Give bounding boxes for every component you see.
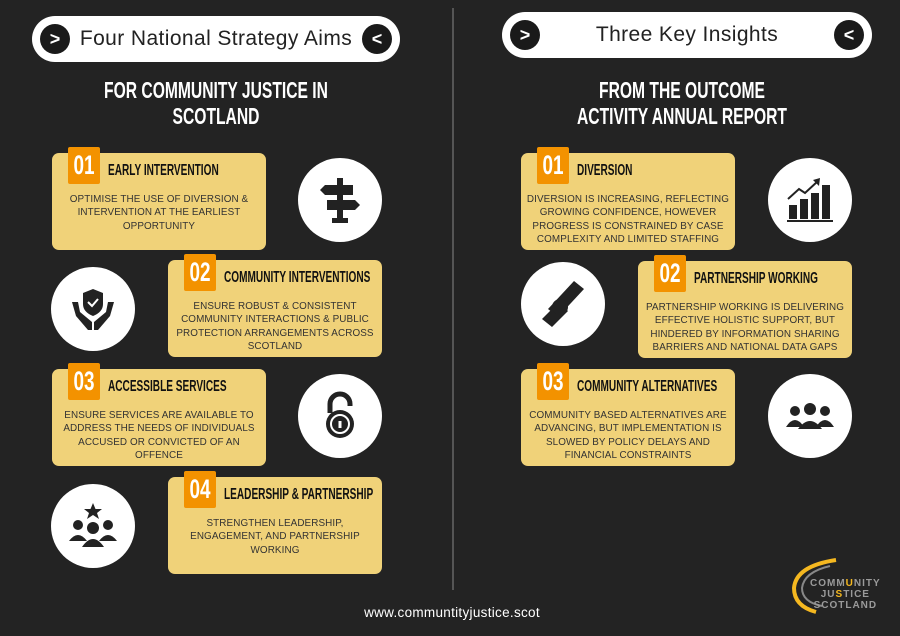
card: community interventions: COMMUNITY INTERACTIONS & PUBLIC (181, 314, 369, 325)
header pill: left (32, 16, 400, 62)
card: accessible services: ACCESSIBLE SERVICES (108, 378, 227, 395)
logo: COMMUNITY (810, 578, 881, 589)
card: community interventions: COMMUNITY INTERVENTIONS (224, 269, 370, 286)
icon: signpost (298, 158, 382, 242)
card: early intervention: OPPORTUNITY (123, 221, 195, 232)
card: community alternatives: ADVANCING, BUT IMPLEMENTATION IS (534, 423, 722, 434)
card: diversion: PROGRESS IS CONSTRAINED BY CASE (532, 221, 724, 232)
card: community alternatives (521, 369, 735, 466)
card: early intervention: OPTIMISE THE USE OF DIVERSION & (70, 194, 248, 205)
header pill: right: > (520, 25, 530, 45)
icon: hands shield (51, 267, 135, 351)
header pill: right: < (844, 25, 854, 45)
header pill: left: > (50, 29, 60, 49)
card: leadership & partnership: ENGAGEMENT, AND PARTNERSHIP (190, 531, 360, 542)
card: community interventions: 02 (189, 257, 211, 287)
logo (792, 558, 881, 614)
subtitle left: SCOTLAND (173, 103, 259, 129)
card: diversion: DIVERSION (577, 162, 632, 179)
card: accessible services: ADDRESS THE NEEDS OF INDIVIDUALS (63, 423, 255, 434)
card: partnership working (638, 261, 852, 358)
header pill: left: < (372, 29, 382, 49)
card: partnership working: 02 (659, 258, 681, 288)
card: community interventions: SCOTLAND (248, 341, 302, 352)
card: diversion: GROWING CONFIDENCE, HOWEVER (540, 207, 716, 218)
card: diversion: COMPLEXITY AND LIMITED STAFFING (537, 234, 719, 245)
card: leadership & partnership: STRENGTHEN LEADERSHIP, (206, 518, 344, 529)
card: community alternatives: COMMUNITY BASED ALTERNATIVES ARE (529, 410, 727, 421)
card: leadership & partnership: LEADERSHIP & PARTNERSHIP (224, 486, 373, 503)
card: diversion: 01 (542, 150, 564, 180)
icon: padlock (298, 374, 382, 458)
logo: JUSTICE (821, 589, 870, 600)
divider (452, 8, 454, 590)
subtitle right (577, 77, 787, 129)
icon: handshake (521, 262, 605, 346)
icon: people star (51, 484, 135, 568)
card: early intervention: 01 (73, 150, 95, 180)
footer url: www.communtityjustice.scot (364, 605, 540, 620)
card: accessible services (52, 369, 266, 466)
subtitle left: FOR COMMUNITY JUSTICE IN (104, 77, 328, 103)
card: community alternatives: FINANCIAL CONSTRAINTS (565, 450, 691, 461)
subtitle right: FROM THE OUTCOME (599, 77, 765, 103)
card: leadership & partnership: WORKING (250, 545, 299, 556)
card: community interventions: ENSURE ROBUST & CONSISTENT (193, 301, 357, 312)
card: community alternatives: SLOWED BY POLICY DELAYS AND (546, 437, 710, 448)
subtitle right: ACTIVITY ANNUAL REPORT (577, 103, 787, 129)
header pill: right: Three Key Insights (596, 23, 778, 46)
card: early intervention: INTERVENTION AT THE EARLIEST (78, 207, 240, 218)
card: community interventions: PROTECTION ARRANGEMENTS ACROSS (176, 328, 374, 339)
card: partnership working: EFFECTIVE HOLISTIC SUPPORT, BUT (655, 315, 835, 326)
card: partnership working: BARRIERS AND NATIONAL DATA GAPS (653, 342, 837, 353)
card: early intervention: EARLY INTERVENTION (108, 162, 219, 179)
card: partnership working: PARTNERSHIP WORKING IS DELIVERING (646, 302, 844, 313)
card: partnership working: PARTNERSHIP WORKING (694, 270, 818, 287)
icon: chart (768, 158, 852, 242)
subtitle left (104, 77, 328, 129)
icon: group (768, 374, 852, 458)
card: leadership & partnership: 04 (189, 474, 211, 504)
card: accessible services: OFFENCE (135, 450, 183, 461)
logo: SCOTLAND (814, 600, 877, 611)
card: diversion: DIVERSION IS INCREASING, REFLECTING (527, 194, 729, 205)
card: community alternatives: COMMUNITY ALTERNATIVES (577, 378, 717, 395)
card: accessible services: 03 (73, 366, 95, 396)
card: accessible services: ACCUSED OR CONVICTED OF AN (78, 437, 240, 448)
header pill: right (502, 12, 872, 58)
card: community alternatives: 03 (542, 366, 564, 396)
card: diversion (521, 153, 735, 250)
card: accessible services: ENSURE SERVICES ARE AVAILABLE TO (64, 410, 254, 421)
card: partnership working: HINDERED BY INFORMATION SHARING (650, 329, 840, 340)
card: early intervention (52, 153, 266, 250)
card: community interventions (168, 260, 382, 357)
card: leadership & partnership (168, 477, 382, 574)
header pill: left: Four National Strategy Aims (80, 27, 352, 50)
